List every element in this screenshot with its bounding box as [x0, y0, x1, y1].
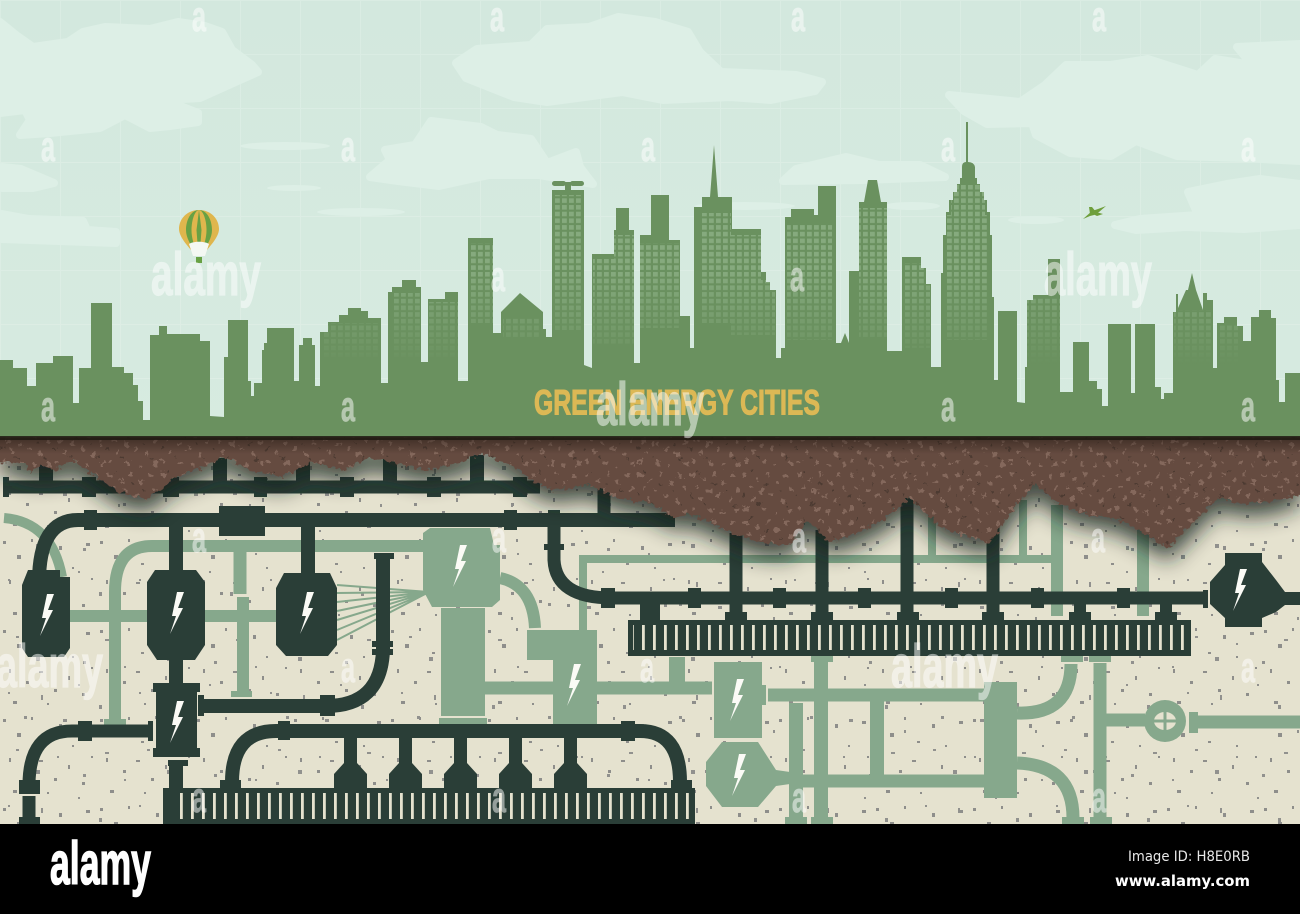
pale energy block with bolt	[423, 528, 500, 725]
watermark text: a	[341, 123, 356, 171]
battery 2	[147, 527, 205, 685]
watermark text: a	[41, 123, 56, 171]
watermark text: a	[492, 514, 507, 562]
watermark text: alamy	[1044, 241, 1152, 308]
manifold nozzles	[334, 735, 587, 789]
battery 3	[153, 683, 204, 790]
hot air balloon	[179, 210, 219, 263]
battery 4	[276, 527, 337, 656]
title: green energy cities: GREEN ENERGY CITIES	[534, 384, 820, 422]
second main pipe with elbow	[39, 478, 675, 582]
watermark text: a	[1241, 123, 1256, 171]
pale pipes: lower right	[706, 656, 1300, 824]
pale thin upper pipes	[583, 500, 1143, 640]
thin clouds	[240, 142, 1064, 224]
watermark text: a	[790, 253, 805, 301]
repaint of green ground edge	[0, 425, 1300, 437]
watermark text: a	[792, 514, 807, 562]
underground background	[0, 437, 1300, 824]
clouds	[0, 17, 1300, 243]
footer bar	[0, 824, 1300, 914]
lower rack	[163, 788, 695, 824]
watermark text: a	[341, 383, 356, 431]
watermark text: alamy	[596, 371, 704, 438]
watermark text: alamy	[891, 633, 998, 700]
valve wheel	[1144, 700, 1186, 742]
watermark text: a	[641, 123, 656, 171]
background light pipe network	[4, 500, 1300, 824]
upper rack	[628, 620, 1191, 656]
watermark text: a	[341, 644, 356, 692]
footer logo: alamy	[50, 830, 151, 897]
watermark text: a	[1241, 383, 1256, 431]
watermark text: a	[941, 123, 956, 171]
watermark text: a	[192, 514, 207, 562]
watermark text: a	[192, 774, 207, 822]
airplane	[1083, 206, 1106, 219]
spray lines	[337, 585, 429, 640]
helipad on tall tower	[552, 181, 584, 190]
dark foreground pipe network	[3, 455, 1300, 824]
watermark text: a	[492, 774, 507, 822]
soil layer	[0, 432, 1300, 548]
watermark text: a	[941, 383, 956, 431]
pale pipes: centre	[485, 578, 712, 725]
watermark text: a	[792, 774, 807, 822]
watermark text: a	[1241, 644, 1256, 692]
battery 1	[22, 570, 70, 657]
pipe from spray head to battery 3	[200, 553, 394, 716]
soil shadow	[0, 450, 1300, 561]
ground top shadow line	[0, 436, 1300, 440]
website: www.alamy.com	[1115, 872, 1250, 890]
watermark text: alamy	[151, 241, 261, 308]
watermark text: alamy	[0, 633, 103, 700]
soil top darkening	[0, 438, 1300, 454]
sky background	[0, 0, 1300, 440]
watermark text: a	[1091, 514, 1106, 562]
image id: Image ID: H8E0RB	[1128, 849, 1250, 865]
watermark text: a	[640, 644, 655, 692]
watermark text: a	[1092, 774, 1107, 822]
right end energy node	[1210, 553, 1300, 627]
city skyline silhouette	[0, 122, 1300, 425]
long header pipe with tee feeders	[544, 498, 1208, 620]
building windows	[324, 185, 1238, 336]
top distribution pipe	[3, 455, 540, 497]
manifold pipe above lower rack	[220, 721, 692, 789]
watermark text: a	[491, 253, 506, 301]
lower left elbow pipe	[19, 721, 153, 824]
watermark text: a	[41, 383, 56, 431]
pale pipes: left side	[4, 518, 425, 725]
